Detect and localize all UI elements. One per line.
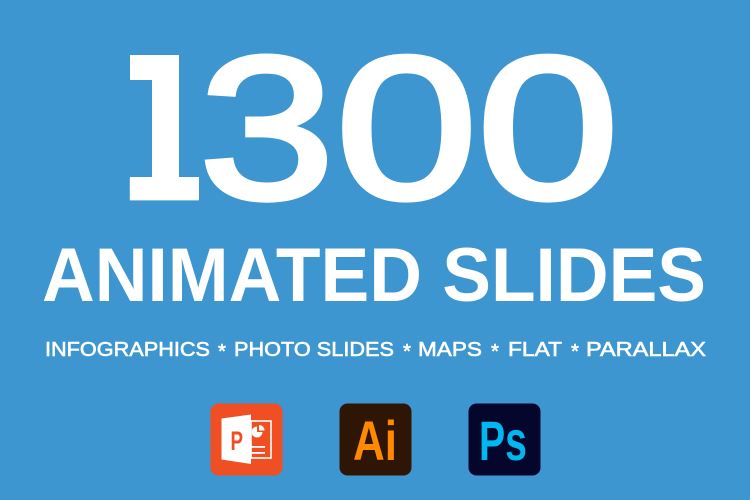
title number 1300: 3 — [199, 14, 334, 241]
subheading: slide types: * — [571, 340, 579, 363]
title number 1300: 0 — [336, 14, 478, 241]
subheading: slide types: * — [491, 340, 499, 363]
subheading: slide types: * — [403, 340, 411, 363]
title number 1300: 1 — [121, 13, 203, 240]
subheading: slide types — [45, 338, 706, 363]
subheading: slide types: PARALLAX — [586, 338, 706, 361]
icon: Photoshop — [468, 404, 540, 476]
subheading: slide types: * — [218, 340, 226, 363]
icon: Illustrator — [340, 404, 412, 476]
subheading: slide types: MAPS — [418, 338, 482, 361]
subheading: slide types: PHOTO SLIDES — [234, 338, 394, 361]
icon: Illustrator: Ai — [353, 409, 397, 472]
title number 1300 — [118, 13, 619, 241]
heading: animated slides: ANIMATED SLIDES — [42, 233, 706, 318]
subheading: slide types: INFOGRAPHICS — [45, 338, 210, 361]
icon: PowerPoint — [210, 404, 282, 476]
icon: Photoshop: Ps — [479, 409, 527, 472]
subheading: slide types: FLAT — [508, 338, 563, 361]
title number 1300: 0 — [477, 14, 619, 241]
icon: PowerPoint: P — [230, 426, 243, 456]
